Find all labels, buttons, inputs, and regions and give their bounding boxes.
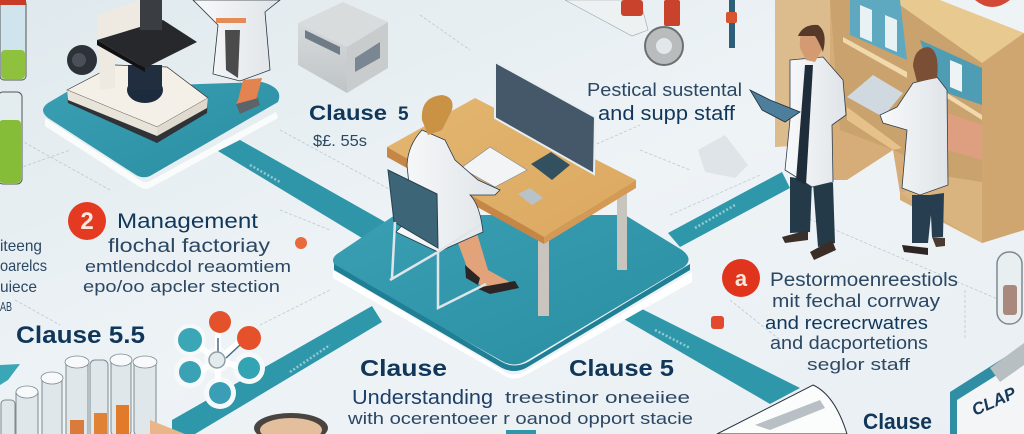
ribbon: lower left connector xyxy=(172,306,382,434)
text: understanding: treestinor oneeiiee xyxy=(505,388,690,407)
legs xyxy=(455,210,515,292)
beaker bottom xyxy=(254,413,328,434)
ribbon: upper right connector xyxy=(668,172,790,247)
scientist with folder xyxy=(750,25,846,260)
coat xyxy=(396,130,500,252)
teal mark left xyxy=(0,364,20,385)
ribbon: upper left connector xyxy=(218,140,385,238)
label: clause top: $£. 55s xyxy=(313,133,367,150)
label: clause top: Clause xyxy=(309,102,387,125)
molecule icon xyxy=(174,311,265,409)
text: practical support: and supp staff xyxy=(598,103,735,125)
text: cropped left column: uiece xyxy=(0,279,37,296)
shelf products xyxy=(850,0,982,160)
chair xyxy=(388,170,486,308)
lab coat person behind microscope xyxy=(193,0,280,114)
desk paper xyxy=(461,147,527,187)
text: performance recommendations xyxy=(765,270,958,374)
label: clause top xyxy=(309,102,409,150)
ribbon: lower right connector xyxy=(622,306,800,404)
central teal platform xyxy=(333,215,692,378)
document bottom xyxy=(717,385,847,434)
icon: capsule vial right xyxy=(997,252,1022,324)
text: management: Management xyxy=(117,210,258,233)
label: clause top: 5 xyxy=(398,104,409,125)
text: performance recommendations: seglor staff xyxy=(807,355,910,374)
text: performance recommendations: Pestormoenreestiols xyxy=(770,270,958,291)
microscope platform xyxy=(43,82,279,189)
icon: green test tube top left xyxy=(0,0,26,80)
text: performance recommendations: mit fechal corrway xyxy=(772,291,940,311)
top centre instruments xyxy=(565,0,737,65)
head xyxy=(422,95,453,135)
label: clause bottom right: Clause xyxy=(863,409,932,434)
test tube rack xyxy=(1,354,185,434)
text: cropped left column: AB xyxy=(0,299,12,314)
red object top right xyxy=(975,0,1010,7)
text: understanding xyxy=(347,387,693,428)
clipboard bottom right: CLAP xyxy=(969,383,1020,420)
text: management xyxy=(83,210,291,296)
desk keyboard xyxy=(518,188,543,205)
small marker left xyxy=(295,237,307,249)
text: understanding: with ocerentoeer r oanod opport stacie xyxy=(347,409,693,428)
desk and monitor xyxy=(387,62,636,316)
cabinet xyxy=(775,0,1024,243)
faint sketch right of desk xyxy=(698,135,748,178)
monitor xyxy=(495,62,595,174)
label: clause 5.5: Clause 5.5 xyxy=(16,322,145,349)
icon: product box xyxy=(298,2,388,93)
text: management: flochal factoriay xyxy=(108,236,271,257)
scientist at shelf xyxy=(880,47,948,255)
text: performance recommendations: and dacportetions xyxy=(770,333,928,353)
icon: green beaker left xyxy=(0,92,22,184)
text: understanding: Understanding xyxy=(352,387,493,409)
label: clause 5 centre: Clause 5 xyxy=(569,355,674,381)
red badge 2 xyxy=(68,202,106,240)
small teal tab bottom centre xyxy=(506,430,536,434)
red badge right xyxy=(722,259,760,297)
small marker right xyxy=(711,316,724,329)
text: cropped left column xyxy=(0,238,47,314)
text: practical support xyxy=(587,80,742,125)
text: management: emtlendcdol reaomtiem xyxy=(85,257,291,276)
person at desk xyxy=(388,95,519,308)
text: cropped left column: oarelcs xyxy=(0,258,47,275)
clipboard bottom right xyxy=(950,343,1024,434)
microscope xyxy=(67,0,208,143)
label: clause centre: Clause xyxy=(360,355,447,381)
text: practical support: Pestical sustental xyxy=(587,80,742,100)
red badge right: a xyxy=(735,266,748,291)
text: performance recommendations: and recrecrwatres xyxy=(765,313,928,333)
text: management: epo/oo apcler stection xyxy=(83,277,280,296)
text: cropped left column: iteeng xyxy=(0,238,42,255)
red badge 2: 2 xyxy=(80,208,94,235)
